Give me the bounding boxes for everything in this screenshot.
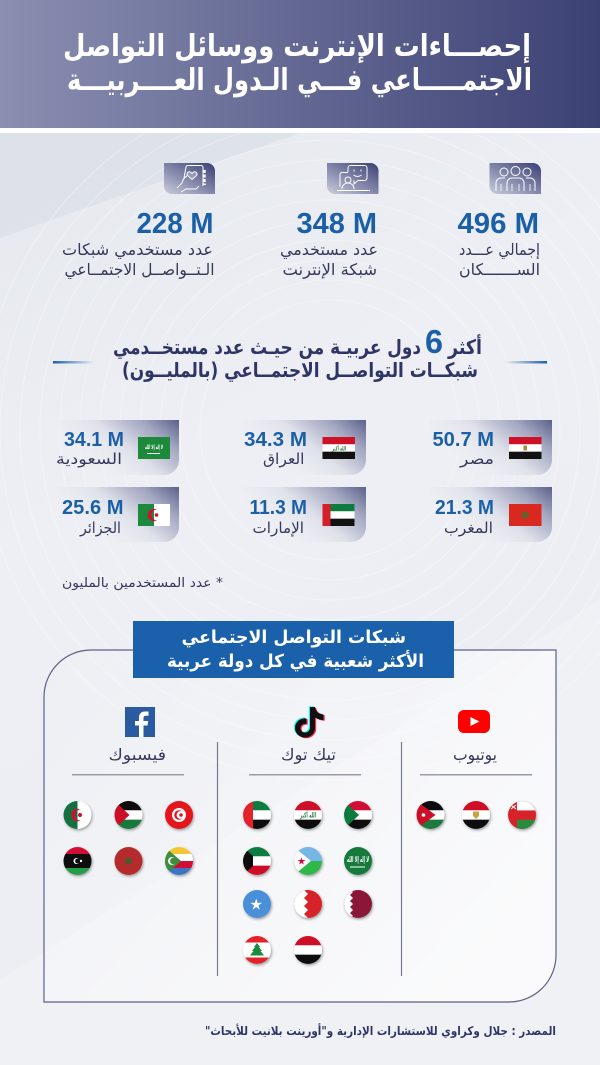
heading box: شبكات التواصل الاجتماعي (182, 627, 406, 648)
flag: Algeria (138, 504, 170, 526)
heading box (133, 621, 454, 678)
card: Iraq (244, 420, 366, 475)
label: social media users (62, 240, 214, 280)
title: إحصـــاءات الإنترنت ووسائل التواصل (63, 29, 531, 64)
flag: Oman (508, 801, 536, 829)
card: Morocco: المغرب (444, 519, 493, 537)
flag: Djibouti: ★ (297, 856, 306, 868)
section heading: top 6 countries: دول عربيـة من حيـث عدد مستخــدمي (113, 335, 421, 360)
icon: people (490, 163, 541, 194)
flag: Egypt (462, 801, 490, 829)
number: 348 M: 348 M (296, 208, 377, 240)
footnote: * عدد المستخدمين بالمليون (62, 576, 224, 591)
card: Algeria (57, 487, 179, 542)
card: Morocco (430, 487, 552, 542)
label: total population: الســـــــكان (459, 260, 540, 279)
header banner (0, 0, 600, 128)
section heading: top 6 countries (53, 323, 547, 383)
flag: UAE (243, 801, 271, 829)
flag: Djibouti (294, 847, 322, 875)
section heading: top 6 countries: شبكــات التواصــل الاجتمــاعي (بالمليــون) (122, 358, 478, 383)
flag: Somalia: ★ (250, 896, 263, 914)
flag: Tunisia (165, 801, 193, 829)
flag: Saudi Arabia: لا إله إلا الله (145, 444, 163, 451)
card: Egypt (430, 420, 552, 475)
flag: Palestine (114, 801, 142, 829)
label: total population (459, 240, 540, 279)
flag: Algeria (64, 801, 92, 829)
flag: Kuwait (243, 847, 271, 875)
flag: Sudan (344, 801, 372, 829)
card: Iraq: العراق (263, 450, 304, 468)
flag: Lebanon (243, 936, 271, 964)
label: internet users: شبكة الإنترنت (282, 260, 377, 280)
flag: Iraq (294, 801, 322, 829)
label: Facebook: فيسبوك (108, 745, 166, 765)
card: Egypt: مصر (459, 450, 494, 468)
number: 496 M: 496 M (458, 208, 539, 240)
flag: Libya (64, 847, 92, 875)
icon: phone with heart (164, 163, 215, 194)
flag: Yemen (294, 936, 322, 964)
icon: laptop chat (327, 163, 378, 194)
icon: YouTube (458, 710, 490, 733)
card: Morocco: 21.3 M (435, 497, 494, 519)
flag: UAE (322, 504, 354, 526)
card: UAE (244, 487, 366, 542)
stat: social media users (62, 163, 215, 280)
icon: Facebook (125, 707, 155, 737)
flag: Saudi Arabia (344, 847, 372, 875)
flag: Somalia (243, 890, 271, 918)
flag: Iraq: الله أكبر (299, 810, 316, 820)
stat: internet users (280, 163, 378, 280)
flag: Comoros (165, 847, 193, 875)
flag: Saudi Arabia: لا إله إلا الله (347, 855, 369, 864)
label: TikTok: تيك توك (281, 745, 336, 765)
flag: Morocco (114, 847, 142, 875)
flag: Qatar (344, 890, 372, 918)
title (63, 29, 532, 98)
stat: total population (458, 163, 541, 279)
label: YouTube: يوتيوب (453, 745, 497, 765)
heading box: الأكثر شعبية في كل دولة عربية (167, 650, 424, 672)
icon: TikTok (294, 706, 325, 738)
flag: Morocco (509, 504, 542, 526)
section heading: top 6 countries: أكثر (447, 333, 482, 359)
card: Algeria: 25.6 M (62, 497, 124, 519)
flag: Jordan (416, 801, 444, 829)
card: Egypt: 50.7 M (432, 429, 494, 451)
card: UAE: الإمارات (252, 519, 304, 537)
card: Algeria: الجزائر (79, 519, 121, 537)
flag: Egypt (509, 437, 542, 459)
column: TikTok (243, 706, 372, 964)
column: Facebook (64, 707, 193, 875)
label: internet users: عدد مستخدمي (280, 240, 378, 260)
panel: top countries cards (56, 420, 552, 542)
card: Saudi Arabia: 34.1 M (64, 429, 124, 451)
card: Iraq: 34.3 M (244, 429, 307, 451)
card: Saudi Arabia (56, 420, 179, 475)
flag: Iraq: الله أكبر (331, 444, 346, 452)
flag: Bahrain (294, 890, 322, 918)
label: social media users: الـتــواصــل الاجتمــاعي (64, 260, 214, 280)
card: UAE: 11.3 M (250, 497, 307, 519)
label: internet users (280, 240, 378, 280)
number: 228 M: 228 M (136, 208, 214, 240)
label: social media users: عدد مستخدمي شبكات (62, 240, 213, 260)
card: Saudi Arabia: السعودية (56, 450, 122, 468)
label: total population: إجمالي عـــدد (459, 240, 540, 260)
source line: المصدر : جلال وكراوي للاستشارات الإدارية و"أورينت بلانيت للأبحاث" (205, 1023, 556, 1039)
column: YouTube (416, 710, 536, 829)
section heading: top 6 countries: 6 (425, 323, 443, 360)
panel: most popular networks frame (44, 621, 556, 1002)
